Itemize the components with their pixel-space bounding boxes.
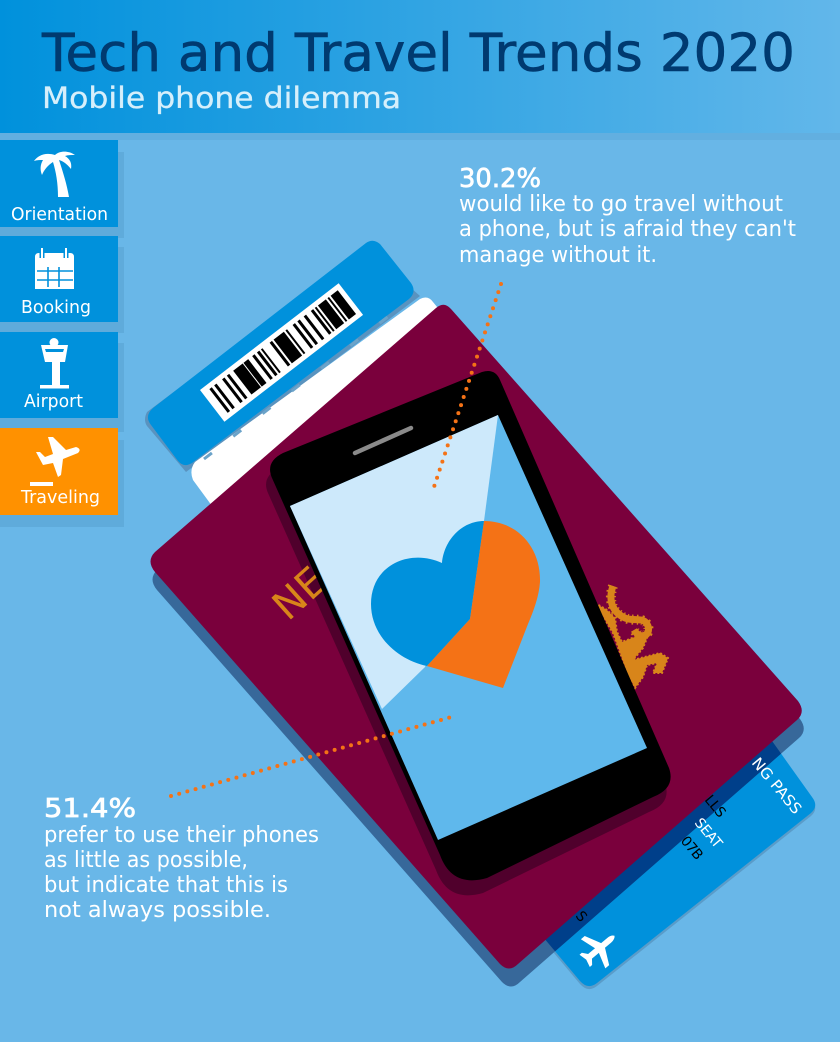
subtitle: Mobile phone dilemma <box>42 81 401 115</box>
title: Tech and Travel Trends 2020 <box>41 23 795 84</box>
boarding pass <box>145 241 815 989</box>
callout: 51.4%: not always possible. <box>44 897 271 923</box>
passport <box>150 305 802 968</box>
callout: 51.4%: but indicate that this is <box>44 872 288 898</box>
callout: 51.4%: as little as possible, <box>44 847 248 873</box>
lower boarding pass card <box>470 640 815 989</box>
dotted leader lines <box>171 284 501 796</box>
speaker <box>355 428 411 453</box>
nav: traveling: Traveling <box>20 487 100 508</box>
nav: traveling <box>0 428 118 515</box>
navigation panel <box>0 140 124 527</box>
boarding pass text layer: 07B <box>677 833 706 863</box>
nav: orientation: Orientation <box>11 204 108 225</box>
callout: 30.2%: would like to go travel without <box>459 191 783 217</box>
nav: booking <box>0 236 118 322</box>
callout: 30.2% <box>459 164 796 268</box>
phone body <box>270 371 671 880</box>
callout: 51.4% <box>44 794 319 923</box>
callout: 30.2%: manage without it. <box>459 242 657 268</box>
nav: booking: Booking <box>21 297 91 318</box>
icon: plane on pass <box>572 921 627 975</box>
passport shadow <box>152 572 804 986</box>
perforation <box>204 312 394 459</box>
heart icon <box>371 521 540 688</box>
passport title: NE <box>264 558 336 629</box>
icon: control tower <box>40 338 69 388</box>
boarding pass text layer: SEAT <box>691 815 725 852</box>
header banner <box>0 0 840 133</box>
nav: orientation <box>0 140 118 227</box>
callout: 30.2%: a phone, but is afraid they can't <box>459 216 796 242</box>
nav: airport <box>0 332 118 418</box>
icon: palm tree <box>34 152 75 197</box>
icon: calendar <box>35 248 74 289</box>
passport lion emblem <box>595 586 668 688</box>
white ticket section <box>191 298 460 510</box>
barcode <box>200 283 363 422</box>
boarding pass text layer: S <box>572 908 590 925</box>
boarding pass text layer: LLS <box>701 792 729 821</box>
callout: 51.4%: prefer to use their phones <box>44 822 319 848</box>
boarding pass text layer <box>572 754 805 975</box>
phone screen <box>290 415 647 840</box>
light beam <box>290 415 498 709</box>
callout: 51.4%: 51.4% <box>44 794 136 824</box>
nav: airport: Airport <box>24 391 83 412</box>
phone shadow <box>266 386 667 895</box>
pass text: NG PASS <box>748 754 805 818</box>
phone <box>270 371 671 880</box>
ticket stub shadow <box>145 248 420 472</box>
callout: 30.2%: 30.2% <box>459 164 541 194</box>
icon: departing plane <box>30 437 80 486</box>
blue ticket stub <box>148 241 414 465</box>
